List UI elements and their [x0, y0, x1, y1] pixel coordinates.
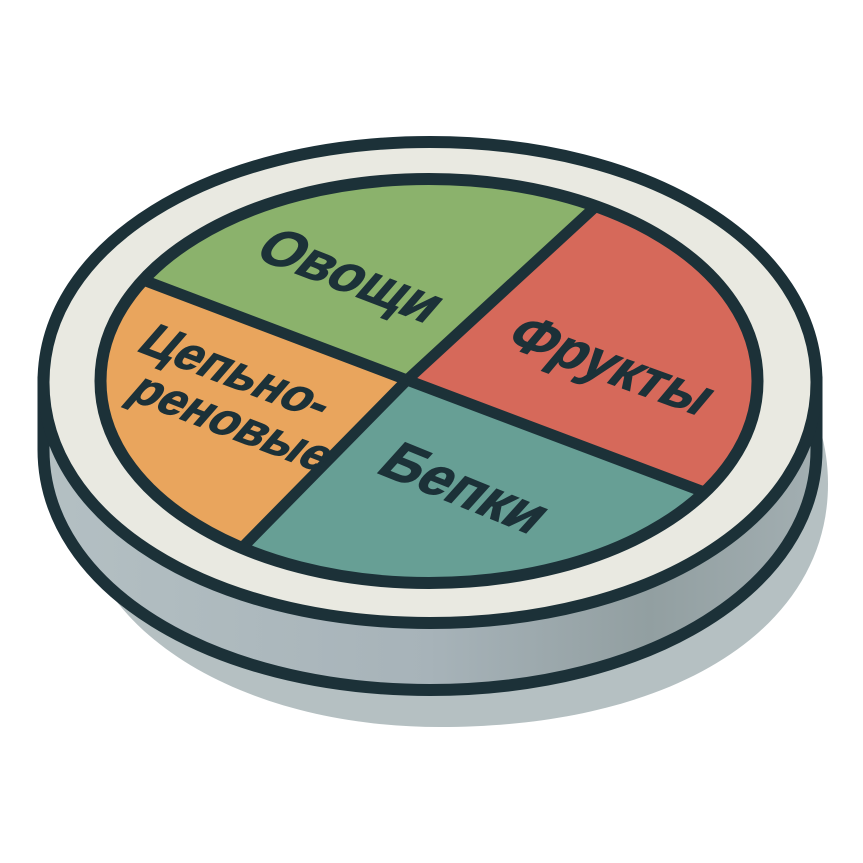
plate rim: [44, 142, 816, 623]
plate illustration: [38, 136, 828, 727]
label: Цепьно-реновые: реновые: [118, 364, 348, 481]
sector: grains: [106, 286, 398, 541]
label: Фрукты: Фрукты: [494, 305, 731, 425]
plate face sectors: [106, 185, 752, 577]
sector: fruits: [417, 213, 752, 486]
sector: vegetables: [154, 185, 585, 374]
plate face outline: [100, 179, 758, 583]
sector: proteins: [252, 386, 694, 577]
label: Бепки: Бепки: [365, 433, 565, 544]
label: Овощи: Овощи: [244, 218, 460, 333]
label: Цепьно-реновые: Цепьно-: [128, 315, 347, 429]
sector dividers: [145, 208, 703, 546]
drop shadow: [75, 241, 828, 727]
plate side wall: [44, 382, 816, 690]
